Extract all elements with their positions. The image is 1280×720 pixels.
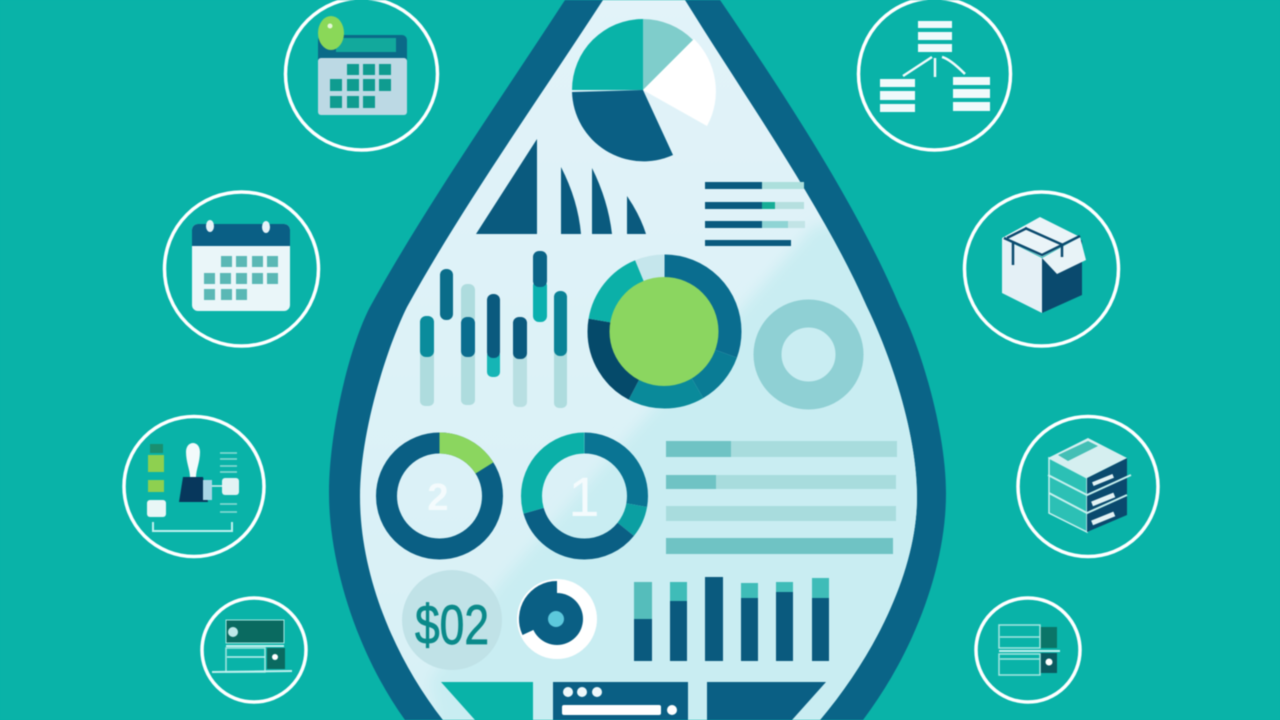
price badge: $02 [415, 593, 489, 656]
donut chart with green centre [601, 268, 728, 395]
progress lines [705, 182, 805, 246]
icon: cardboard box [964, 192, 1118, 346]
icon: calendar [164, 192, 318, 346]
bottom teal panel [441, 682, 533, 720]
donut gauge 2 [386, 443, 492, 549]
radial chart [517, 579, 597, 659]
bottom dark panel [707, 682, 826, 720]
bottom browser panel [553, 682, 688, 720]
icon: workflow tools [124, 416, 264, 556]
water drop outline [329, 0, 946, 720]
icon: hierarchy network [858, 0, 1010, 150]
candlestick chart [420, 251, 567, 408]
water drop interior [340, 0, 960, 720]
icon: server laptop [202, 598, 306, 702]
icon: server rack [976, 598, 1080, 702]
horizontal bars [666, 441, 897, 554]
donut gauge 1: 1 [568, 465, 600, 528]
triangle area chart [476, 139, 646, 234]
light ring chart [768, 314, 850, 396]
icon: calendar with pin [286, 0, 438, 150]
pie chart [572, 19, 716, 161]
icon: stacked boxes [1018, 416, 1158, 556]
price badge [402, 570, 502, 670]
stacked column chart [634, 577, 829, 661]
donut gauge 1 [532, 443, 638, 549]
donut gauge 2: 2 [427, 477, 449, 519]
